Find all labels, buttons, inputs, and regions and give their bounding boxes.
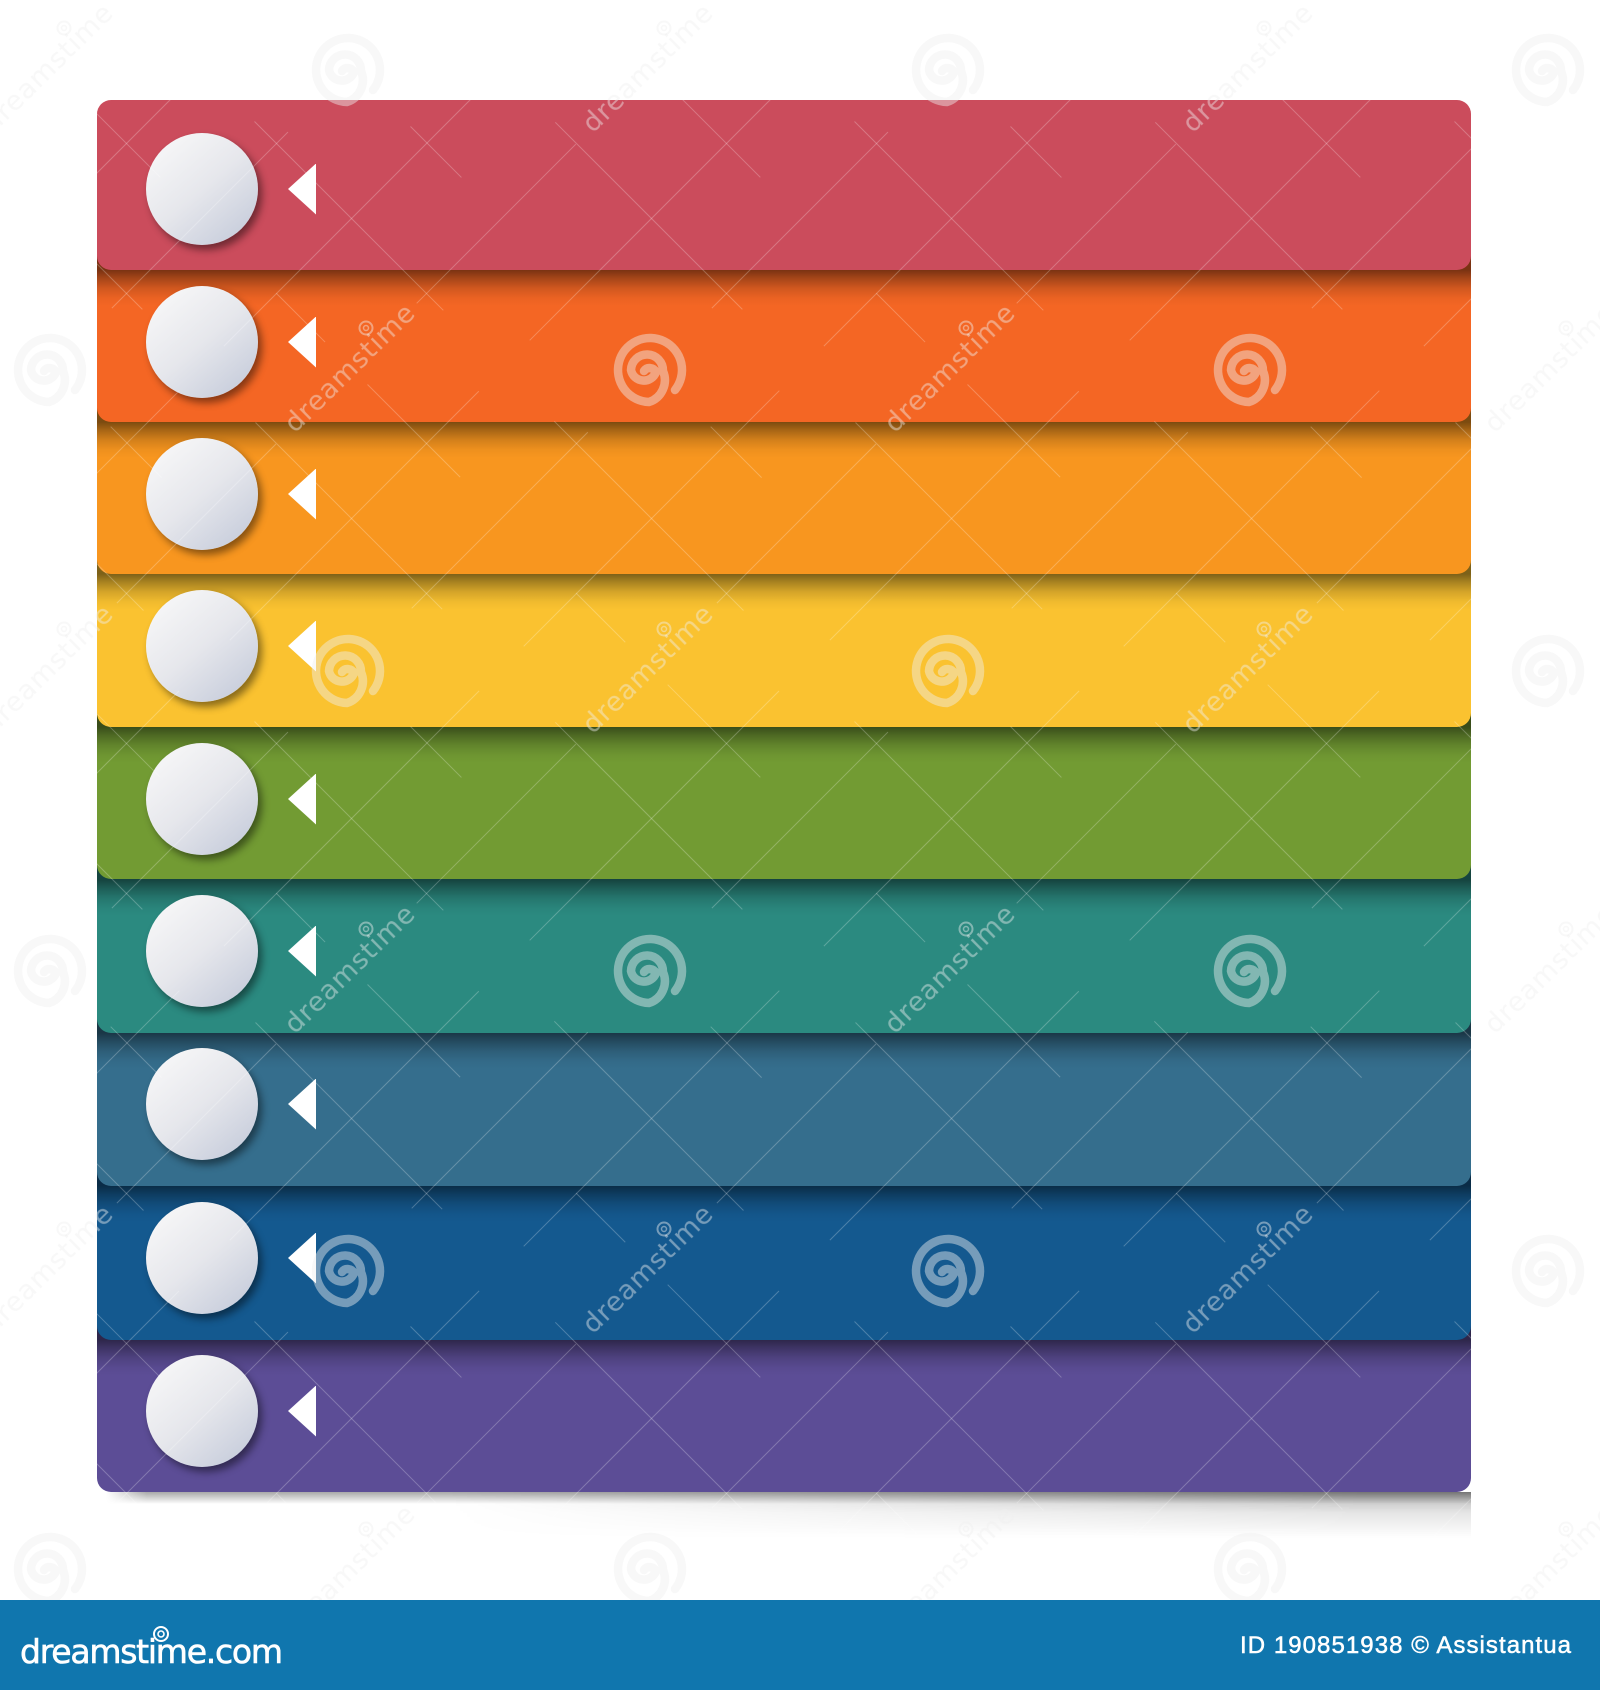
arrow: teal bar [288,926,316,976]
panel: blue bar [97,1170,1471,1340]
watermark overlay: dreamstime [1176,1199,1319,1340]
panel: teal bar [97,864,1471,1033]
icon: orange bar circle [146,286,258,398]
watermark overlay: dreamstime [278,899,421,1040]
icon: purple bar circle [146,1355,258,1467]
footer band [0,1600,1600,1690]
panel: purple bar [97,1324,1471,1492]
watermark overlay: dreamstime [576,0,719,139]
arrow: purple bar [288,1386,316,1436]
arrow: yellow bar [288,620,316,672]
image id and credit: ID 190851938 © Assistantua [1240,1632,1572,1659]
drop shadow under stack [110,1492,1471,1530]
watermark overlay: dreamstime [1176,599,1319,740]
watermark overlay: dreamstime [576,1199,719,1340]
watermark overlay: dreamstime [576,599,719,740]
arrow: green bar [288,774,316,824]
arrow: orange bar [288,316,316,368]
panel: yellow bar [97,558,1471,727]
panel: orange bar [97,254,1471,422]
arrow: slate bar [288,1078,316,1130]
panel: slate bar [97,1017,1471,1186]
icon: teal bar circle [146,895,258,1007]
arrow: red bar [288,164,316,214]
watermark overlay: dreamstime [878,298,1021,439]
icon: red bar circle [146,133,258,245]
arrow: amber bar [288,468,316,520]
icon: yellow bar circle [146,590,258,702]
icon: green bar circle [146,743,258,855]
arrow: blue bar [288,1232,316,1284]
icon: blue bar circle [146,1202,258,1314]
watermark overlay: dreamstime [278,298,421,439]
icon: footer logo spiral [154,1627,168,1641]
watermark overlay: dreamstime [1176,0,1319,139]
panel: green bar [97,711,1471,879]
panel: amber bar [97,406,1471,574]
watermark overlay: dreamstime [878,899,1021,1040]
icon: slate bar circle [146,1048,258,1160]
footer logo text: dreamstime.com [20,1632,283,1671]
watermark overlay: dreamstime [278,1499,421,1640]
icon: amber bar circle [146,438,258,550]
panel: red bar [97,100,1471,270]
watermark overlay: dreamstime [878,1499,1021,1640]
